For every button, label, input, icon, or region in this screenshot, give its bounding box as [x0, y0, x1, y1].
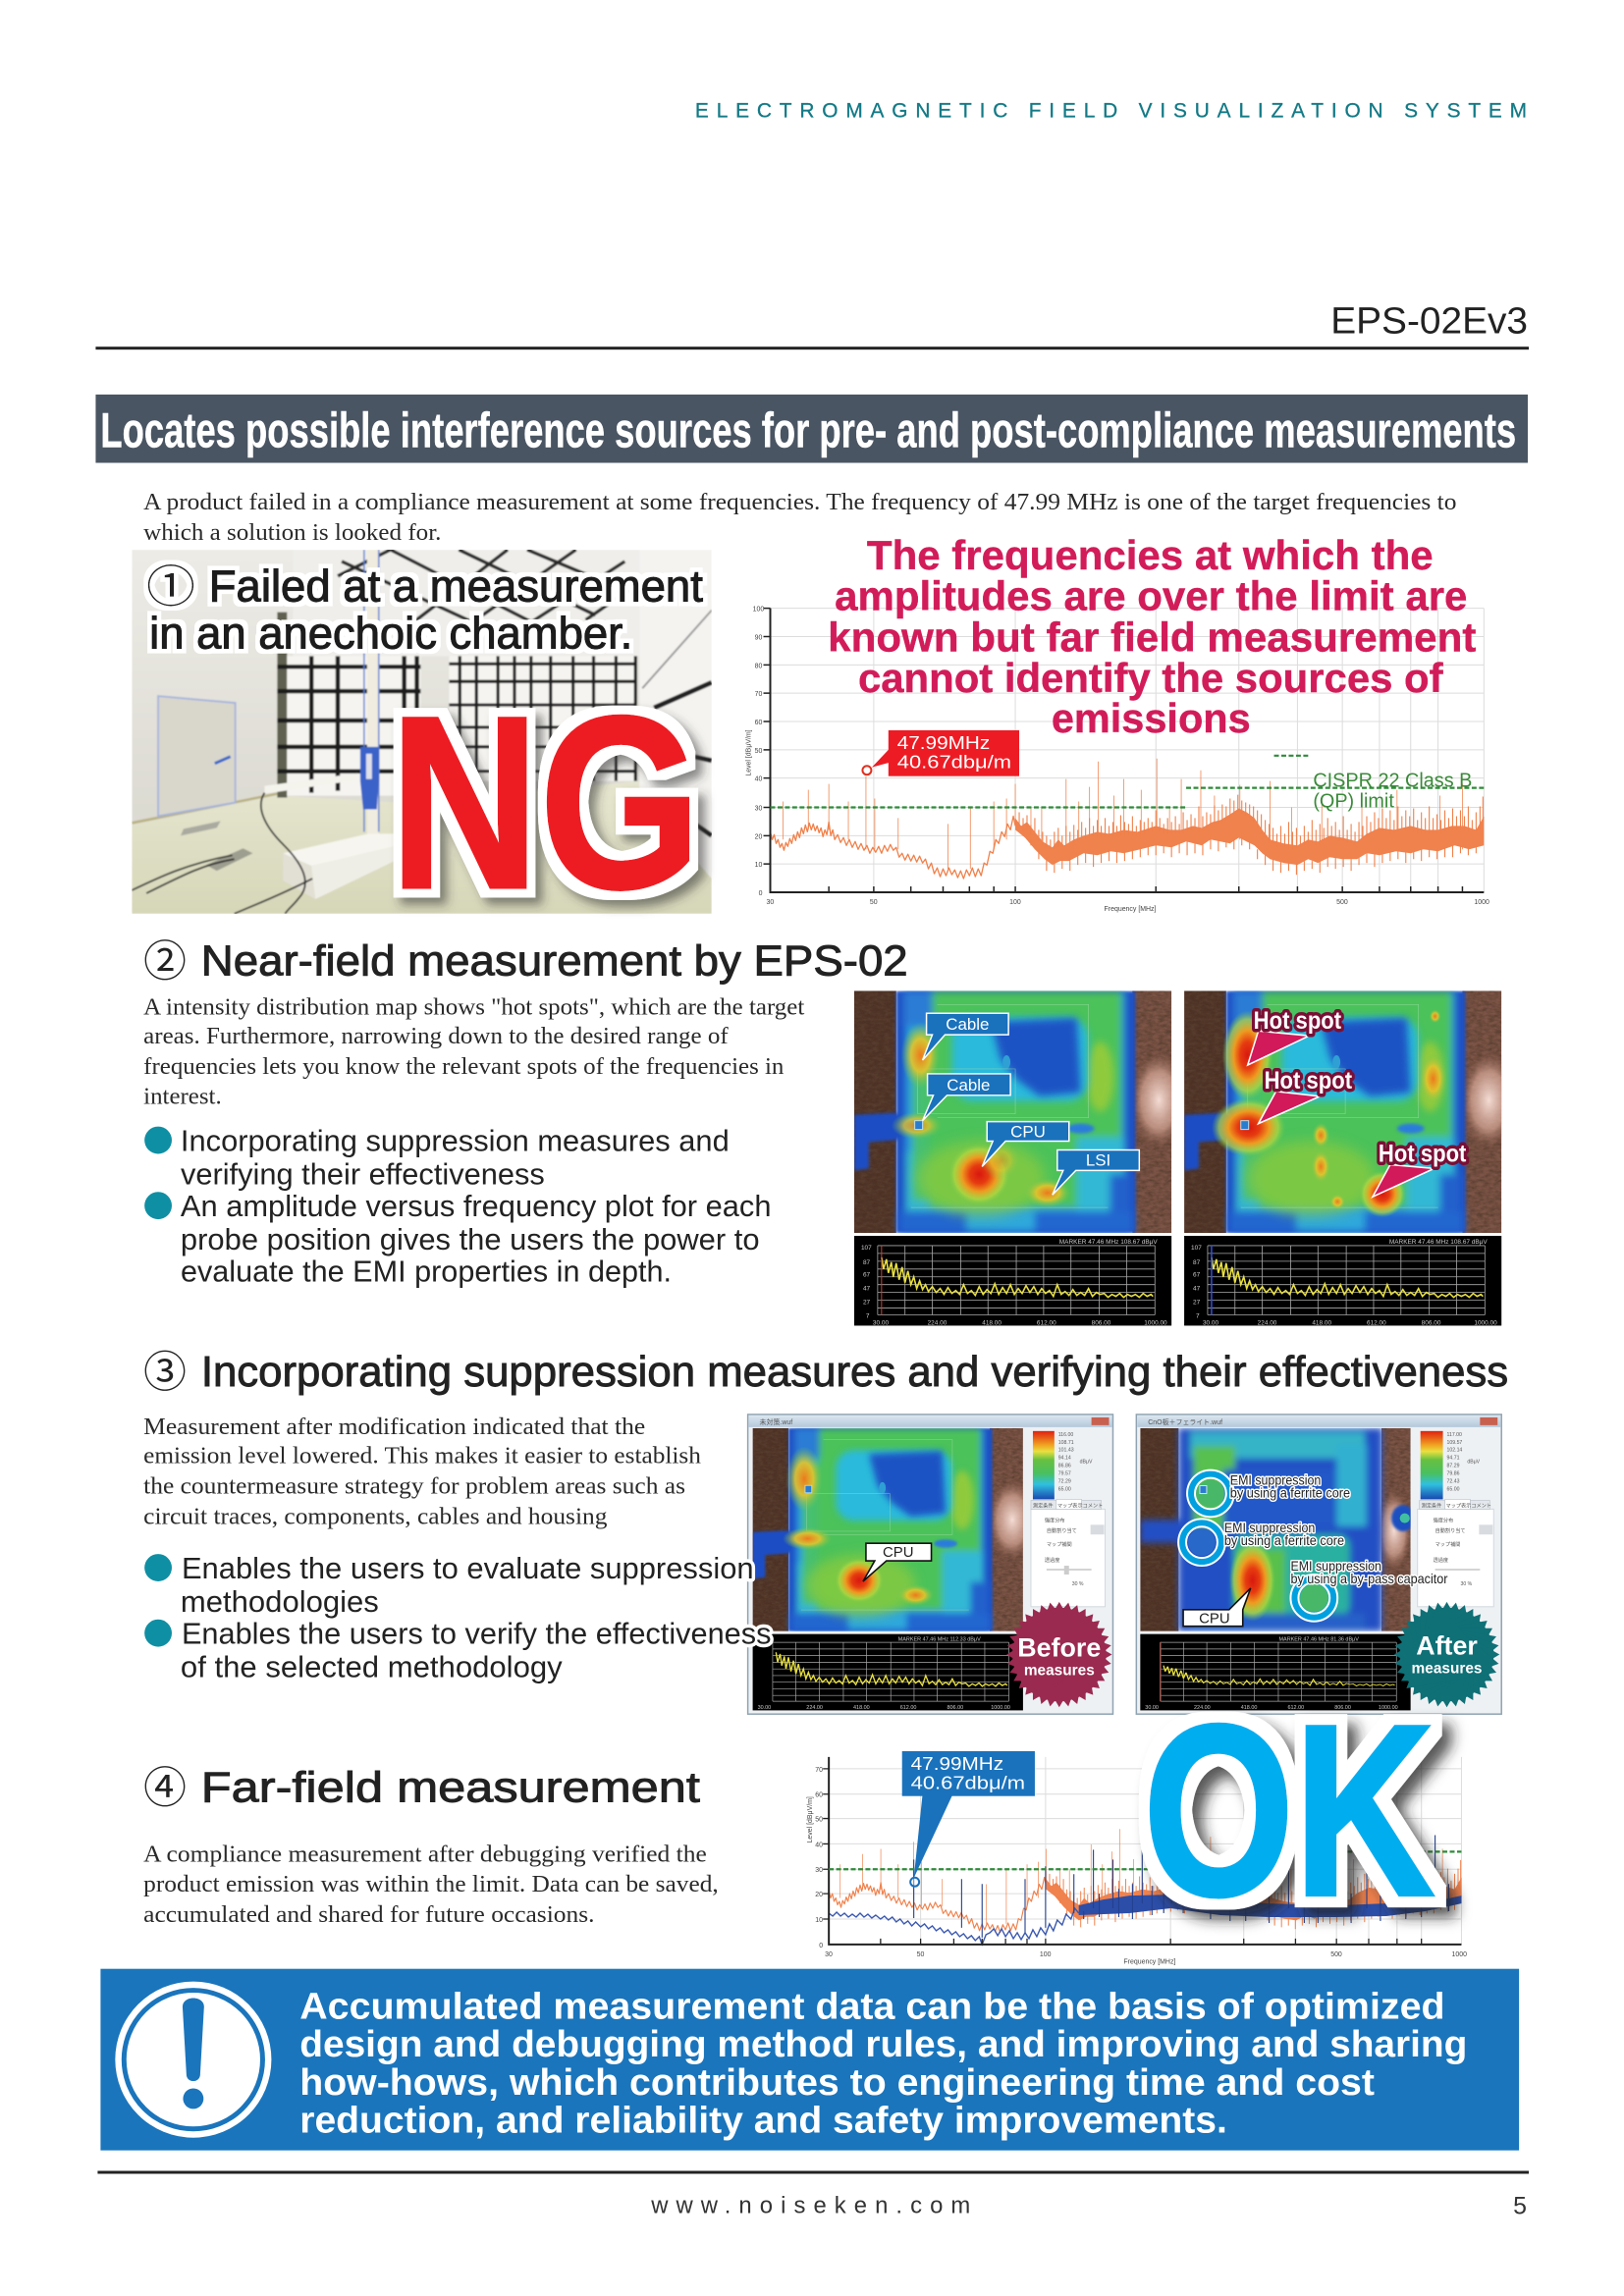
- spectrum plot: before: 1000.00: [991, 1705, 1010, 1711]
- color scale legend: [1421, 1431, 1481, 1499]
- photo caption: in an anechoic chamber.: [149, 608, 632, 658]
- bullets: step 2: Incorporating suppression measures and: [181, 1123, 730, 1157]
- chart: far-field spectrum before measures: 30: [755, 805, 762, 812]
- header: system name: ELECTROMAGNETIC FIELD VISUALIZATION SYSTEM: [695, 100, 1527, 123]
- OK stamp: OK: [1143, 1674, 1435, 1947]
- photo caption: [146, 552, 703, 658]
- chart: far-field spectrum before measures: 0: [759, 890, 763, 897]
- spectrum plot: left: 27: [863, 1300, 871, 1307]
- CPU callout: [1183, 1588, 1251, 1628]
- settings pane: 測定条件: [1422, 1501, 1441, 1509]
- color scale legend: 94.14: [1058, 1456, 1071, 1462]
- labels: suppression measures: by using a ferrite core: [1224, 1533, 1344, 1548]
- spectrum plot: before: 612.00: [900, 1705, 916, 1711]
- chart: far-field spectrum before measures: 50: [755, 748, 762, 755]
- badge: after measures: [1394, 1585, 1517, 1716]
- icon: exclamation mark: [115, 1982, 271, 2138]
- callouts: component labels: [923, 1013, 1139, 1195]
- text: step 2 description: areas. Furthermore, narrowing down to the desired range of: [143, 1024, 729, 1049]
- labels: suppression measures: [1224, 1473, 1448, 1586]
- spectrum plot: before: MARKER 47.46 MHz 112.33 dBμV: [898, 1637, 981, 1643]
- chart: far-field spectrum before measures: 90: [755, 634, 762, 641]
- spectrum plot: right: 418.00: [1312, 1319, 1331, 1326]
- heading: step 3: ③: [143, 1337, 187, 1400]
- bullets: step 2: evaluate the EMI properties in depth.: [181, 1255, 672, 1289]
- spectrum plot: right: 47: [1193, 1286, 1201, 1293]
- settings pane: マップ表示: [1057, 1501, 1083, 1509]
- settings pane: 透過度: [1045, 1556, 1059, 1564]
- chart: far-field spectrum before measures: 40: [755, 776, 762, 783]
- color scale legend: 79.57: [1058, 1471, 1071, 1477]
- spectrum plot: after: [1140, 1634, 1411, 1711]
- settings pane: 強度分布: [1045, 1516, 1065, 1523]
- callout panel: conclusion: [100, 1969, 1519, 2151]
- chart: far-field spectrum before measures: (QP) limit: [1313, 790, 1394, 812]
- spectrum plot: left: 47: [863, 1286, 871, 1293]
- chart: far-field spectrum after measures: Level [dBμV/m]: [807, 1796, 814, 1842]
- callouts: hot spots: [1248, 1008, 1466, 1197]
- spectrum plot: right: 67: [1193, 1272, 1201, 1279]
- badge: before measures: measures: [1024, 1662, 1095, 1679]
- spectrum plot: left: 67: [863, 1272, 871, 1279]
- chart: far-field spectrum after measures: 30: [815, 1867, 823, 1874]
- text: step 4 description: A compliance measurement after debugging verified the: [143, 1842, 707, 1867]
- text: step 3 description: [143, 1415, 701, 1529]
- color scale legend: 109.57: [1447, 1440, 1462, 1446]
- color scale legend: 102.14: [1447, 1448, 1462, 1454]
- labels: suppression measures: EMI suppression: [1224, 1521, 1315, 1535]
- settings pane: 自動割り当て: [1435, 1526, 1466, 1534]
- footer: website: www.noiseken.com: [650, 2192, 970, 2218]
- chart: far-field spectrum before measures: Level [dBμV/m]: [746, 729, 753, 776]
- spectrum plot: after: 418.00: [1241, 1705, 1257, 1711]
- chart: far-field spectrum before measures: Frequency [MHz]: [1105, 906, 1157, 913]
- spectrum plot: left: 1000.00: [1144, 1319, 1167, 1326]
- chart: far-field spectrum after measures: 30: [825, 1951, 833, 1958]
- text: step 4 description: product emission was within the limit. Data can be saved,: [143, 1872, 719, 1897]
- spectrum plot: left: 806.00: [1092, 1319, 1111, 1326]
- document number: EPS-02Ev3: [1330, 300, 1528, 342]
- chart: far-field spectrum before measures: 30: [767, 899, 774, 906]
- spectrum plot: right: 7: [1196, 1313, 1200, 1320]
- text: step 3 description: the countermeasure strategy for problem areas such as: [143, 1473, 685, 1499]
- color scale legend: 117.00: [1447, 1432, 1462, 1438]
- photo caption: ①: [146, 552, 195, 616]
- callout: failing frequency: [862, 730, 1019, 776]
- spectrum plot: right: 27: [1193, 1300, 1201, 1307]
- footer: page number: 5: [1513, 2193, 1527, 2219]
- labels: suppression measures: EMI suppression: [1290, 1559, 1381, 1574]
- chart: far-field spectrum before measures: 10: [755, 862, 762, 869]
- bullets: step 2: probe position gives the users the power to: [181, 1222, 760, 1256]
- panel: software window before measures: 未対策.wuf: [760, 1417, 792, 1426]
- text: step 4 description: [143, 1842, 719, 1928]
- text: step 4 description: accumulated and shared for future occasions.: [143, 1902, 595, 1928]
- callouts: component labels: Cable: [947, 1076, 990, 1095]
- chart: far-field spectrum before measures: 50: [870, 899, 878, 906]
- bullets: step 3: Enables the users to evaluate suppression: [182, 1551, 754, 1585]
- spectrum plot: left: MARKER 47.46 MHz 108.67 dBμV: [1059, 1239, 1158, 1246]
- chart: far-field spectrum before measures: 20: [755, 833, 762, 840]
- spectrum plot: right: MARKER 47.46 MHz 108.67 dBμV: [1389, 1239, 1488, 1246]
- conclusion text: design and debugging method rules, and improving and sharing: [299, 2024, 1467, 2065]
- chart: far-field spectrum before measures: 100: [1009, 899, 1021, 906]
- color scale legend: 101.43: [1058, 1448, 1074, 1454]
- callout: same frequency after fix: 47.99MHz: [911, 1754, 1003, 1775]
- text: step 3 description: Measurement after modification indicated that the: [143, 1415, 645, 1440]
- labels: suppression measures: EMI suppression: [1230, 1473, 1321, 1488]
- panel: anechoic chamber photo with NG stamp: [132, 550, 712, 940]
- color scale legend: 65.00: [1058, 1486, 1071, 1492]
- settings pane: [1031, 1499, 1106, 1607]
- color scale legend: 79.86: [1447, 1471, 1460, 1477]
- callouts: component labels: Cable: [946, 1015, 989, 1034]
- spectrum plot: right: 224.00: [1258, 1319, 1277, 1326]
- limit label: CISPR 22 Class B: [1313, 771, 1472, 792]
- spectrum plot: before: 806.00: [947, 1705, 963, 1711]
- chart: far-field spectrum before measures: 80: [755, 663, 762, 669]
- chart: far-field spectrum after measures: 10: [815, 1917, 823, 1924]
- settings pane: 強度分布: [1434, 1516, 1453, 1523]
- heading: limitation of far-field measurement: [828, 532, 1476, 741]
- heading: step 4: [143, 1753, 700, 1816]
- settings pane: 30 %: [1072, 1581, 1084, 1587]
- spectrum plot: right: 30.00: [1203, 1319, 1219, 1326]
- badge: after measures: After: [1416, 1631, 1478, 1661]
- chart: far-field spectrum before measures: 60: [755, 720, 762, 726]
- chart: far-field spectrum before measures: 1000: [1474, 899, 1489, 906]
- heading: limitation of far-field measurement: cannot identify the sources of: [858, 655, 1443, 701]
- bullets: step 3: methodologies: [181, 1584, 379, 1619]
- spectrum plot: after: 1000.00: [1379, 1705, 1398, 1711]
- color scale legend: [1033, 1431, 1093, 1499]
- limit lines: [829, 1851, 1461, 1869]
- spectrum plot: left: [854, 1236, 1171, 1326]
- spectrum plot: before: 418.00: [853, 1705, 870, 1711]
- labels: suppression measures: by using a by-pass capacitor: [1290, 1572, 1448, 1586]
- color scale legend: 72.43: [1447, 1479, 1460, 1485]
- CPU callout: CPU: [1199, 1612, 1230, 1628]
- callout: same frequency after fix: 40.67dbμ/m: [911, 1774, 1025, 1794]
- intro paragraph: [143, 490, 1457, 546]
- callout: same frequency after fix: [902, 1751, 1035, 1887]
- spectrum plot: left: 418.00: [982, 1319, 1001, 1326]
- spectrum plot: after: 30.00: [1145, 1705, 1159, 1711]
- chart: far-field spectrum after measures: Frequency [MHz]: [1123, 1959, 1175, 1966]
- color scale legend: 116.00: [1058, 1432, 1073, 1438]
- bullets: step 2: An amplitude versus frequency plot for each: [181, 1189, 771, 1223]
- callout: failing frequency: 40.67dbμ/m: [897, 753, 1011, 774]
- photo caption: Failed at a measurement: [209, 561, 703, 612]
- spectrum plot: after: MARKER 47.46 MHz 81.36 dBμV: [1279, 1637, 1359, 1643]
- limit lines: [770, 756, 1484, 807]
- conclusion text: [299, 1986, 1467, 2142]
- chart: far-field spectrum after measures: 100: [1040, 1951, 1052, 1958]
- settings pane: 自動割り当て: [1047, 1526, 1077, 1534]
- panel: software window after measures: CnO板＋フェライト.wuf: [1148, 1417, 1222, 1426]
- bullets: step 3: of the selected methodology: [181, 1649, 563, 1683]
- badge: before measures: Before: [1017, 1633, 1101, 1663]
- color scale legend: 65.00: [1447, 1486, 1460, 1492]
- conclusion text: how-hows, which contributes to engineering time and cost: [299, 2062, 1375, 2104]
- heading: limitation of far-field measurement: amplitudes are over the limit are: [835, 573, 1467, 619]
- spectrum plot: right: 612.00: [1367, 1319, 1386, 1326]
- settings pane: [1418, 1499, 1493, 1607]
- spectrum plot: right: 806.00: [1422, 1319, 1441, 1326]
- chart: far-field spectrum before measures: 500: [1336, 899, 1348, 906]
- chart: far-field spectrum after measures: 20: [815, 1892, 823, 1898]
- panel: software window after measures: [1136, 1415, 1517, 1716]
- spectrum plot: right: [1184, 1236, 1501, 1326]
- spectrum plot: before: [753, 1634, 1023, 1711]
- chart: far-field spectrum before measures: 70: [755, 691, 762, 698]
- spectrum plot: right: 1000.00: [1474, 1319, 1497, 1326]
- settings pane: コメント: [1083, 1502, 1103, 1509]
- spectrum plot: left: 107: [861, 1245, 872, 1252]
- callouts: hot spots: Hot spot: [1265, 1068, 1352, 1095]
- spectrum plot: left: 612.00: [1037, 1319, 1056, 1326]
- settings pane: マップ補間: [1435, 1540, 1460, 1548]
- color scale legend: 87.29: [1447, 1464, 1460, 1469]
- settings pane: マップ表示: [1446, 1501, 1471, 1509]
- settings pane: 測定条件: [1033, 1501, 1054, 1509]
- bullets: step 3: [144, 1551, 771, 1683]
- spectrum plot: right: 107: [1191, 1245, 1202, 1252]
- badge: before measures: [1006, 1585, 1129, 1716]
- heading: step 2: Near-field measurement by EPS-02: [201, 937, 908, 986]
- settings pane: コメント: [1471, 1502, 1491, 1509]
- NG stamp: NG: [390, 666, 701, 940]
- chart: far-field spectrum after measures: 50: [815, 1817, 823, 1824]
- labels: suppression measures: by using a ferrite core: [1230, 1485, 1350, 1500]
- chart: far-field spectrum after measures: 40: [815, 1842, 823, 1848]
- heading: step 2: ②: [143, 927, 187, 989]
- heading: step 2: [143, 927, 908, 989]
- chart: far-field spectrum after measures: 1000: [1452, 1951, 1467, 1958]
- spectrum plot: left: 87: [863, 1259, 871, 1266]
- settings pane: マップ補間: [1047, 1540, 1072, 1548]
- intro paragraph: which a solution is looked for.: [143, 520, 441, 546]
- intro paragraph: A product failed in a compliance measurement at some frequencies. The frequency of 47.99 MHz is one of the target frequencies to: [143, 490, 1457, 515]
- rings: suppression points: [1182, 1474, 1333, 1618]
- color scale legend: 86.86: [1058, 1464, 1071, 1469]
- color scale legend: 72.29: [1058, 1479, 1071, 1485]
- text: step 2 description: [143, 994, 805, 1110]
- CPU callout: CPU: [883, 1545, 913, 1561]
- color scale legend: dBμV: [1467, 1460, 1481, 1466]
- spectrum plot: before: 224.00: [806, 1705, 823, 1711]
- heading: limitation of far-field measurement: emissions: [1052, 695, 1251, 741]
- spectrum plot: right: 87: [1193, 1259, 1201, 1266]
- text: step 3 description: circuit traces, components, cables and housing: [143, 1504, 608, 1529]
- chart: far-field spectrum after measures: 70: [815, 1767, 823, 1774]
- callouts: hot spots: Hot spot: [1254, 1008, 1341, 1035]
- heading: limitation of far-field measurement: The frequencies at which the: [867, 532, 1434, 578]
- spectrum plot: left: 30.00: [873, 1319, 889, 1326]
- badge: after measures: measures: [1412, 1660, 1483, 1677]
- conclusion text: reduction, and reliability and safety improvements.: [299, 2101, 1227, 2142]
- panel: near-field map with hot spots: [1184, 990, 1518, 1326]
- chart: far-field spectrum before measures: 100: [753, 607, 764, 614]
- chart: far-field spectrum after measures: [807, 1751, 1467, 1966]
- bullets: step 2: [144, 1123, 771, 1289]
- chart: far-field spectrum after measures: 60: [815, 1792, 823, 1799]
- chart: far-field spectrum after measures: 0: [819, 1943, 823, 1949]
- heading: limitation of far-field measurement: known but far field measurement: [828, 614, 1476, 660]
- CPU callout: [863, 1543, 932, 1581]
- spectrum plot: after: 224.00: [1194, 1705, 1211, 1711]
- spectrum plot: before: 30.00: [758, 1705, 771, 1711]
- callout: failing frequency: 47.99MHz: [897, 733, 990, 754]
- settings pane: 透過度: [1434, 1556, 1448, 1564]
- callouts: hot spots: Hot spot: [1379, 1141, 1466, 1167]
- text: step 3 description: emission level lowered. This makes it easier to establish: [143, 1444, 701, 1469]
- color scale legend: dBμV: [1080, 1460, 1093, 1466]
- panel: software window before measures: [748, 1415, 1129, 1716]
- callouts: component labels: LSI: [1086, 1150, 1110, 1169]
- chamber photo illustration: [132, 550, 712, 914]
- bullets: step 3: Enables the users to verify the effectiveness: [182, 1617, 771, 1651]
- heading: step 4: ④: [143, 1753, 187, 1816]
- color scale legend: 94.71: [1447, 1456, 1460, 1462]
- text: step 2 description: interest.: [143, 1085, 222, 1110]
- spectrum plot: after: 612.00: [1287, 1705, 1304, 1711]
- conclusion text: Accumulated measurement data can be the basis of optimized: [299, 1986, 1445, 2027]
- text: step 2 description: A intensity distribution map shows "hot spots", which are the target: [143, 994, 805, 1020]
- heading: step 3: Incorporating suppression measures and verifying their effectiveness: [201, 1348, 1508, 1396]
- color scale legend: 108.71: [1058, 1440, 1074, 1446]
- chart: far-field spectrum after measures: 50: [917, 1951, 925, 1958]
- bullets: step 2: verifying their effectiveness: [181, 1156, 545, 1191]
- spectrum plot: after: 806.00: [1334, 1705, 1351, 1711]
- panel: near-field map with component labels: [854, 990, 1188, 1326]
- chart: far-field spectrum before measures: [746, 607, 1489, 913]
- spectrum plot: left: 7: [866, 1313, 870, 1320]
- spectrum plot: left: 224.00: [928, 1319, 947, 1326]
- chart: far-field spectrum after measures: 500: [1330, 1951, 1342, 1958]
- settings pane: 30 %: [1460, 1581, 1473, 1587]
- callouts: component labels: CPU: [1010, 1123, 1046, 1142]
- heading: step 4: Far-field measurement: [201, 1764, 700, 1812]
- text: step 2 description: frequencies lets you know the relevant spots of the frequencies in: [143, 1054, 784, 1080]
